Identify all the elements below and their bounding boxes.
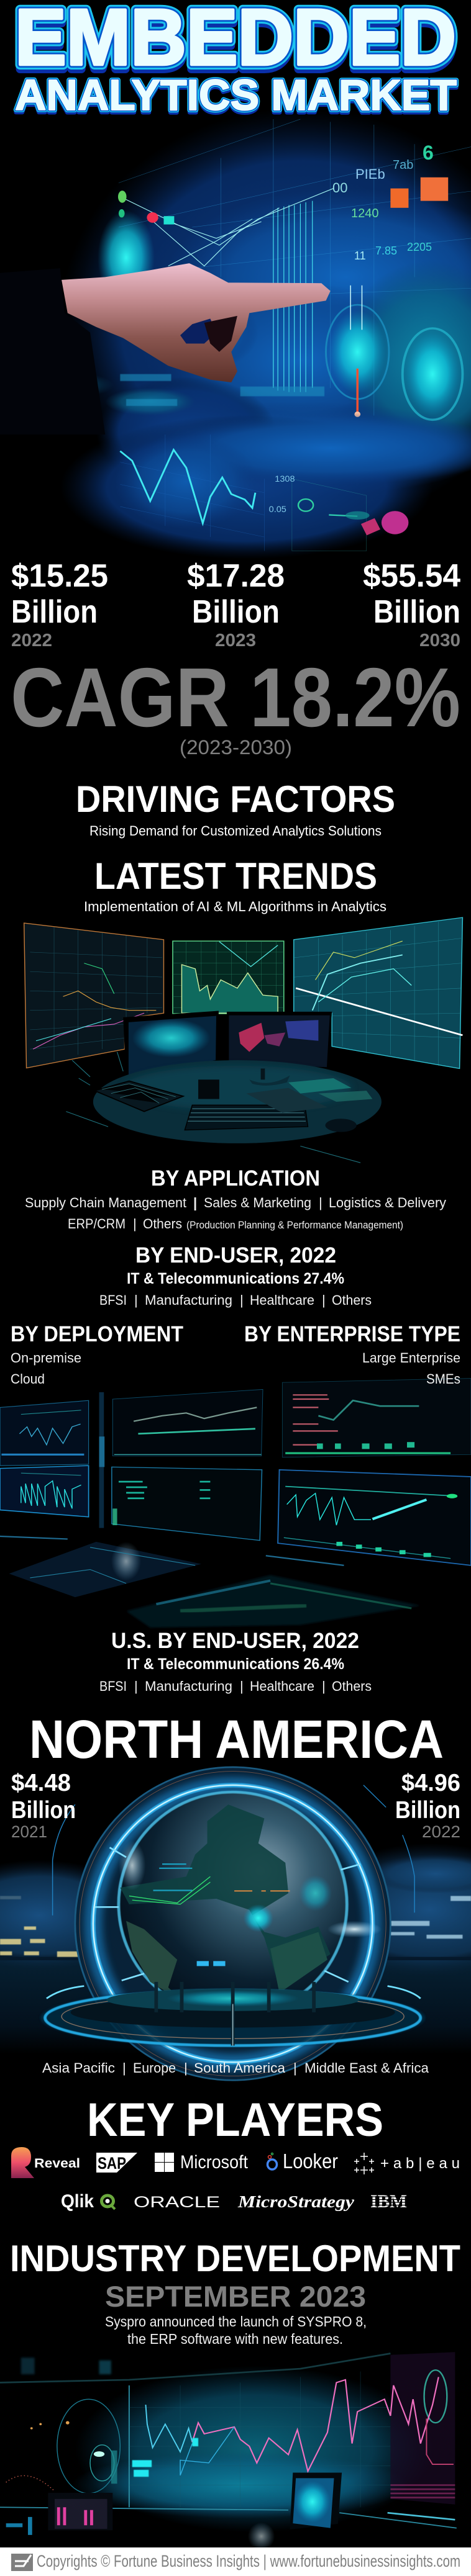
logo: Reveal (11, 2147, 80, 2178)
by deployment: On-premise (11, 1350, 81, 1366)
by enterprise type: Large Enterprise (362, 1350, 460, 1366)
by end-user 2022: | (134, 1292, 138, 1308)
hero dashboard numbers: 6 (423, 142, 434, 164)
driving factors: Rising Demand for Customized Analytics Solutions (89, 823, 382, 839)
north america 2021: $4.48 (11, 1770, 71, 1796)
logo: MicroStrategy: MicroStrategy (237, 2192, 355, 2211)
north america 2021 (11, 1770, 76, 1841)
hero dashboard numbers: 11 (354, 250, 366, 262)
by end-user 2022: Manufacturing (145, 1292, 232, 1308)
stat: 2023 market size: Billion (192, 594, 280, 630)
title: ANALYTICS MARKET (15, 73, 457, 122)
driving factors (76, 778, 395, 839)
north america 2022: Billion (395, 1797, 460, 1824)
by end-user 2022 (99, 1243, 372, 1308)
by application: (Production Planning & Performance Management) (186, 1219, 403, 1231)
by deployment: Cloud (11, 1371, 45, 1387)
logo: Qlik: Qlik (61, 2191, 94, 2212)
logo: Tableau: + a b | e a u (380, 2155, 460, 2172)
by application (25, 1166, 446, 1232)
key players heading: KEY PLAYERS (87, 2094, 383, 2146)
U.S. by end-user 2022: Healthcare (250, 1678, 314, 1694)
by application: Sales & Marketing (204, 1195, 311, 1210)
stat: 2030 market size (363, 558, 460, 651)
north america 2022: $4.96 (401, 1770, 460, 1796)
U.S. by end-user 2022: U.S. BY END-USER, 2022 (111, 1629, 359, 1653)
stat: 2023 market size: 2023 (215, 631, 256, 651)
CAGR figure: (2023-2030) (180, 736, 292, 759)
industry development: SEPTEMBER 2023 (105, 2280, 366, 2313)
footer band (0, 2547, 471, 2576)
by application: | (193, 1195, 197, 1210)
by end-user 2022: | (240, 1292, 244, 1308)
hero image: hand touching holographic dashboard: 0.05 (269, 505, 286, 514)
hero image: hand touching holographic dashboard: 1308 (275, 474, 295, 484)
U.S. by end-user 2022: | (134, 1678, 138, 1694)
industry development: Syspro announced the launch of SYSPRO 8, (105, 2313, 367, 2330)
by enterprise type: SMEs (426, 1371, 460, 1387)
by end-user 2022: IT & Telecommunications 27.4% (127, 1270, 344, 1287)
stat: 2030 market size: Billion (373, 594, 460, 630)
stat: 2022 market size: Billion (11, 594, 98, 630)
latest trends: Implementation of AI & ML Algorithms in Analytics (84, 899, 386, 914)
logo: Microsoft (155, 2152, 249, 2173)
logo: Microsoft: Microsoft (180, 2152, 249, 2173)
title: EMBEDDED (15, 0, 456, 86)
hero dashboard numbers: PIEb (355, 166, 385, 182)
title: ANALYTICS MARKET (15, 71, 457, 119)
by application: | (133, 1216, 137, 1232)
driving factors: DRIVING FACTORS (76, 778, 395, 820)
U.S. by end-user 2022: Manufacturing (145, 1678, 232, 1694)
title: ANALYTICS MARKET (15, 71, 457, 119)
logo: SAP: SAP (98, 2154, 126, 2173)
footer icon: Fortune Business Insights (11, 2554, 33, 2571)
industry development (10, 2238, 460, 2347)
north america 2021: 2021 (11, 1822, 47, 1841)
U.S. by end-user 2022: Others (332, 1678, 372, 1694)
industry development: the ERP software with new features. (127, 2331, 343, 2347)
development image: curved trading screen (0, 2352, 457, 2550)
by end-user 2022: BY END-USER, 2022 (135, 1243, 336, 1268)
other regions: | (122, 2060, 126, 2076)
by end-user 2022: | (322, 1292, 326, 1308)
hero dashboard numbers: 7ab (393, 158, 413, 172)
title: ANALYTICS MARKET (15, 71, 457, 119)
stat: 2023 market size: $17.28 (187, 558, 285, 594)
U.S. by end-user 2022 (99, 1629, 372, 1694)
trends image: monitors on round desk (24, 917, 462, 1163)
globe image (0, 1767, 471, 2080)
by enterprise type (244, 1322, 460, 1387)
other regions: Middle East & Africa (304, 2060, 429, 2076)
by application: | (319, 1195, 322, 1210)
by application: Supply Chain Management (25, 1195, 186, 1210)
hero dashboard numbers: 1240 (351, 207, 379, 220)
logo: Looker: Looker (283, 2150, 338, 2173)
north america 2021: Billion (11, 1797, 76, 1824)
by application: BY APPLICATION (151, 1166, 320, 1191)
hero dashboard numbers: 00 (332, 180, 347, 196)
logo: Tableau (354, 2153, 460, 2174)
hero dashboard numbers: 2205 (407, 241, 432, 253)
other regions: Europe (133, 2060, 176, 2076)
by end-user 2022: Others (332, 1292, 372, 1308)
by application: Others (143, 1216, 182, 1232)
latest trends (84, 855, 386, 914)
by deployment (11, 1322, 183, 1387)
hero dashboard numbers: 7.85 (375, 245, 397, 257)
by end-user 2022: BFSI (99, 1292, 127, 1308)
logo: Oracle: ORACLE (134, 2194, 220, 2211)
by end-user 2022: Healthcare (250, 1292, 314, 1308)
north america 2022: 2022 (422, 1822, 460, 1841)
stat: 2023 market size (187, 558, 285, 651)
logo: IBM: IBM (370, 2191, 407, 2212)
by deployment: BY DEPLOYMENT (11, 1322, 183, 1346)
hero dashboard numbers (332, 142, 434, 262)
title (15, 0, 457, 122)
U.S. by end-user 2022: | (322, 1678, 326, 1694)
other regions (42, 2060, 429, 2076)
hero image: hand touching holographic dashboard (0, 108, 471, 559)
logo: Reveal: Reveal (34, 2156, 80, 2171)
U.S. by end-user 2022: | (240, 1678, 244, 1694)
stat: 2022 market size (11, 558, 108, 651)
north america 2022 (395, 1770, 460, 1841)
stat: 2022 market size: $15.25 (11, 558, 108, 594)
other regions: | (184, 2060, 188, 2076)
U.S. by end-user 2022: BFSI (99, 1678, 127, 1694)
latest trends: LATEST TRENDS (94, 855, 377, 897)
stat: 2030 market size: 2030 (419, 631, 460, 651)
other regions: | (293, 2060, 297, 2076)
stat: 2030 market size: $55.54 (363, 558, 460, 594)
dashboards image: wall of monitors (0, 1379, 471, 1628)
by application: ERP/CRM (68, 1216, 126, 1232)
other regions: South America (194, 2060, 286, 2076)
by application: Logistics & Delivery (329, 1195, 446, 1210)
other regions: Asia Pacific (42, 2060, 115, 2076)
stat: 2022 market size: 2022 (11, 631, 52, 651)
U.S. by end-user 2022: IT & Telecommunications 26.4% (127, 1655, 344, 1673)
logo: Qlik (61, 2191, 115, 2212)
